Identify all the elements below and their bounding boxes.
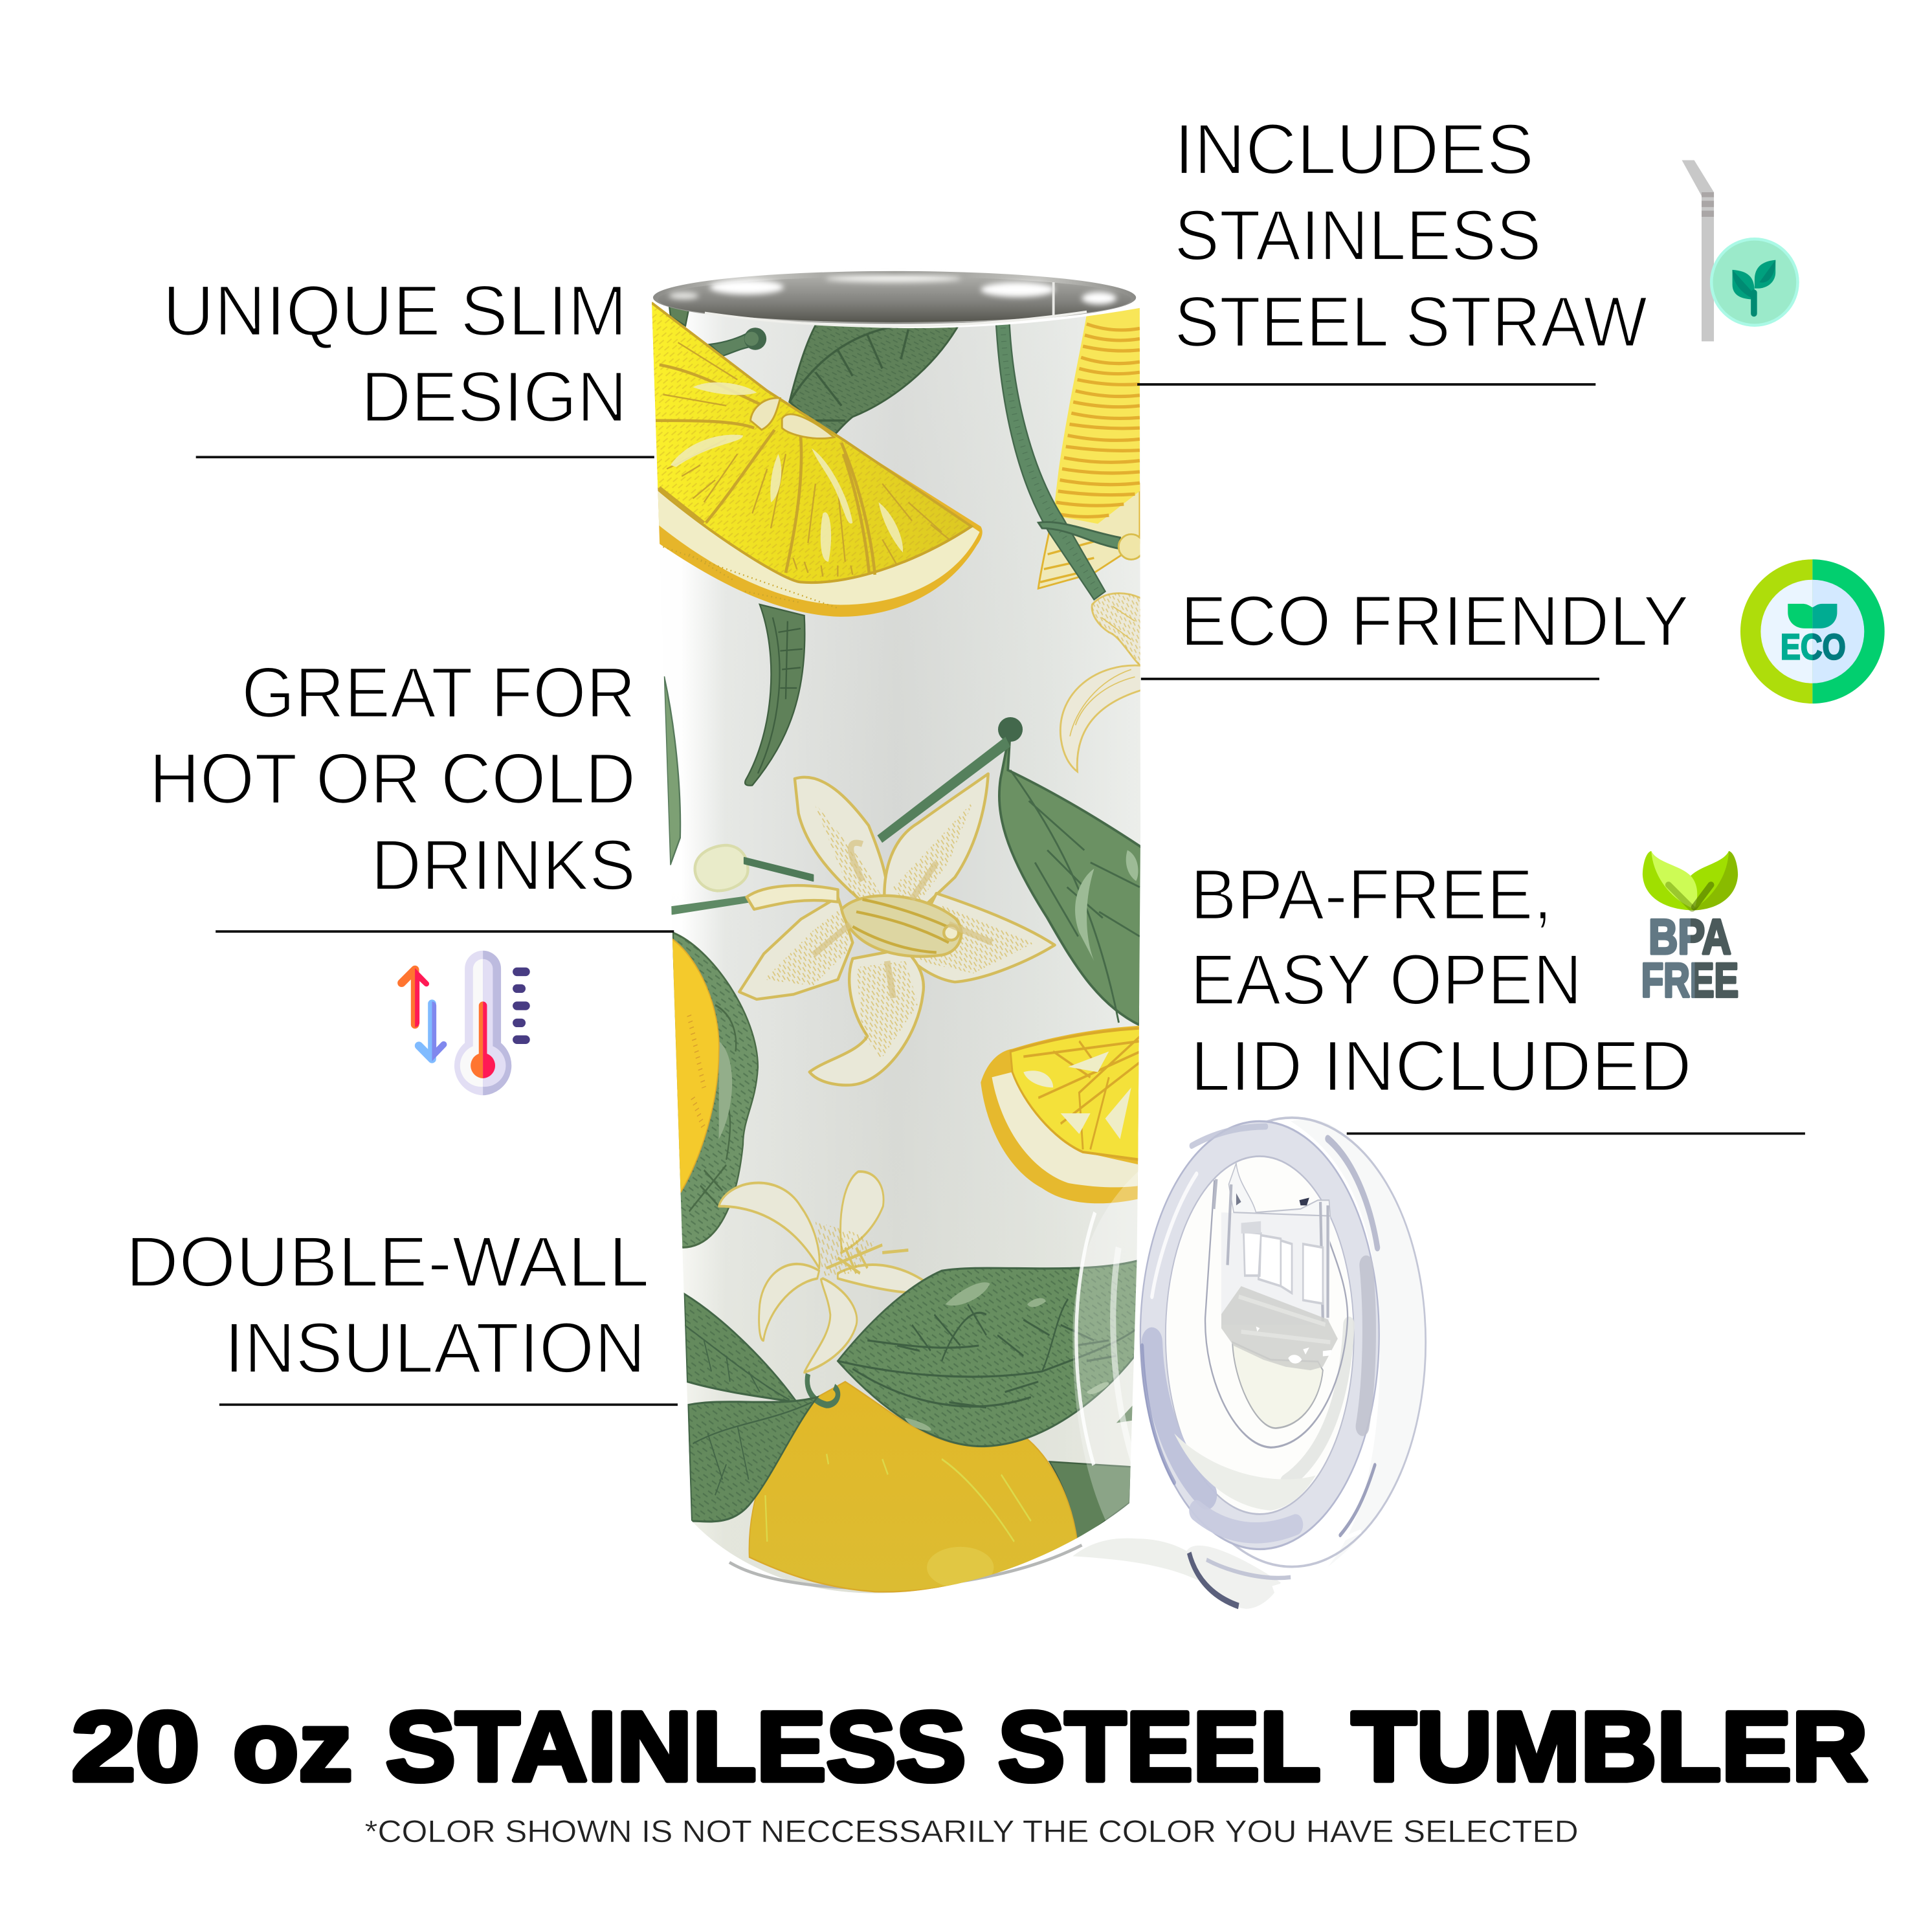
leaf: behind top wedge (669, 302, 960, 786)
lid ring shading (1140, 1121, 1379, 1549)
callout: bpa-free easy open lid: LID INCLUDED (1190, 1027, 1692, 1106)
slider channel (1205, 1180, 1348, 1447)
callout: hot or cold drinks: DRINKS (371, 825, 636, 905)
callout: hot or cold drinks: HOT OR COLD (149, 739, 636, 819)
callout: hot or cold drinks: GREAT FOR (241, 653, 636, 733)
title (71, 1692, 1868, 1802)
icon: eco badge (1740, 559, 1885, 704)
leaves: bottom left (684, 1294, 817, 1522)
icon: bpa free: FREE (1641, 953, 1738, 1007)
lid translucent right wall (1291, 1120, 1427, 1567)
title: TUMBLER (1351, 1692, 1868, 1802)
steel rim (653, 271, 1136, 326)
callout: stainless steel straw: INCLUDES (1174, 109, 1534, 189)
title: STAINLESS (386, 1692, 966, 1802)
icon: bpa free: BPA (1649, 909, 1731, 964)
lemon print artwork (650, 302, 1146, 1592)
title: oz (233, 1692, 352, 1802)
leaf: left edge sliver (664, 676, 680, 865)
callout: bpa-free easy open lid (1190, 855, 1805, 1133)
flower: lower (719, 1171, 938, 1372)
slider mouth (1232, 1342, 1323, 1428)
callout: bpa-free easy open lid: BPA-FREE, (1190, 855, 1553, 935)
title: STEEL (998, 1692, 1321, 1802)
callout: double-wall insulation (126, 1222, 678, 1405)
icon: eco badge: ECO (1781, 627, 1846, 667)
callout: stainless steel straw (1137, 109, 1647, 384)
lid outer body (1072, 1116, 1427, 1609)
callout: double-wall insulation: DOUBLE-WALL (126, 1222, 649, 1302)
lemon slice: top right (1038, 304, 1140, 588)
callout: bpa-free easy open lid: EASY OPEN (1190, 940, 1582, 1020)
icon: steel straw with sprout (1682, 160, 1797, 341)
title: 20 (71, 1692, 199, 1802)
footnote: *COLOR SHOWN IS NOT NECCESSARILY THE COLOR YOU HAVE SELECTED (364, 1814, 1579, 1849)
lid inner well (1167, 1157, 1353, 1514)
callout: hot or cold drinks (149, 653, 674, 931)
callout: unique slim design: UNIQUE SLIM (162, 271, 627, 351)
callout: unique slim design: DESIGN (361, 357, 627, 437)
panel: tumbler (650, 271, 1146, 1593)
flower: top right (1060, 594, 1142, 772)
slider block (1214, 1163, 1338, 1370)
lid skirt highlight (1076, 1212, 1095, 1465)
lid shadow below tumbler (1072, 1538, 1203, 1582)
lemon wedge: top left (650, 302, 983, 617)
lemon: bottom (749, 1374, 1133, 1592)
lid outer rim line (1158, 1118, 1426, 1567)
icon: bpa free (1641, 851, 1738, 1007)
callout: unique slim design (162, 271, 654, 457)
callout: eco friendly: ECO FRIENDLY (1181, 582, 1689, 661)
lid thick ring (1153, 1138, 1367, 1531)
callout: double-wall insulation: INSULATION (224, 1309, 646, 1388)
leaf: large lower (838, 1260, 1138, 1447)
stem: top right branch (996, 322, 1144, 599)
tumbler body background (652, 302, 1140, 1593)
lid lower well shading (1174, 1434, 1315, 1511)
lemon slice: right middle (981, 1026, 1140, 1203)
callout: stainless steel straw: STAINLESS (1174, 196, 1542, 276)
lid tab (1186, 1546, 1291, 1609)
icon: thermometer (402, 951, 530, 1095)
callout: stainless steel straw: STEEL STRAW (1174, 282, 1647, 362)
flower: main centre (672, 774, 1055, 1085)
lid (1072, 1116, 1427, 1609)
lid skirt outer ring (1113, 1247, 1142, 1486)
lemon and leaf: left edge (671, 933, 758, 1247)
leaf: right of flower (877, 717, 1146, 1025)
